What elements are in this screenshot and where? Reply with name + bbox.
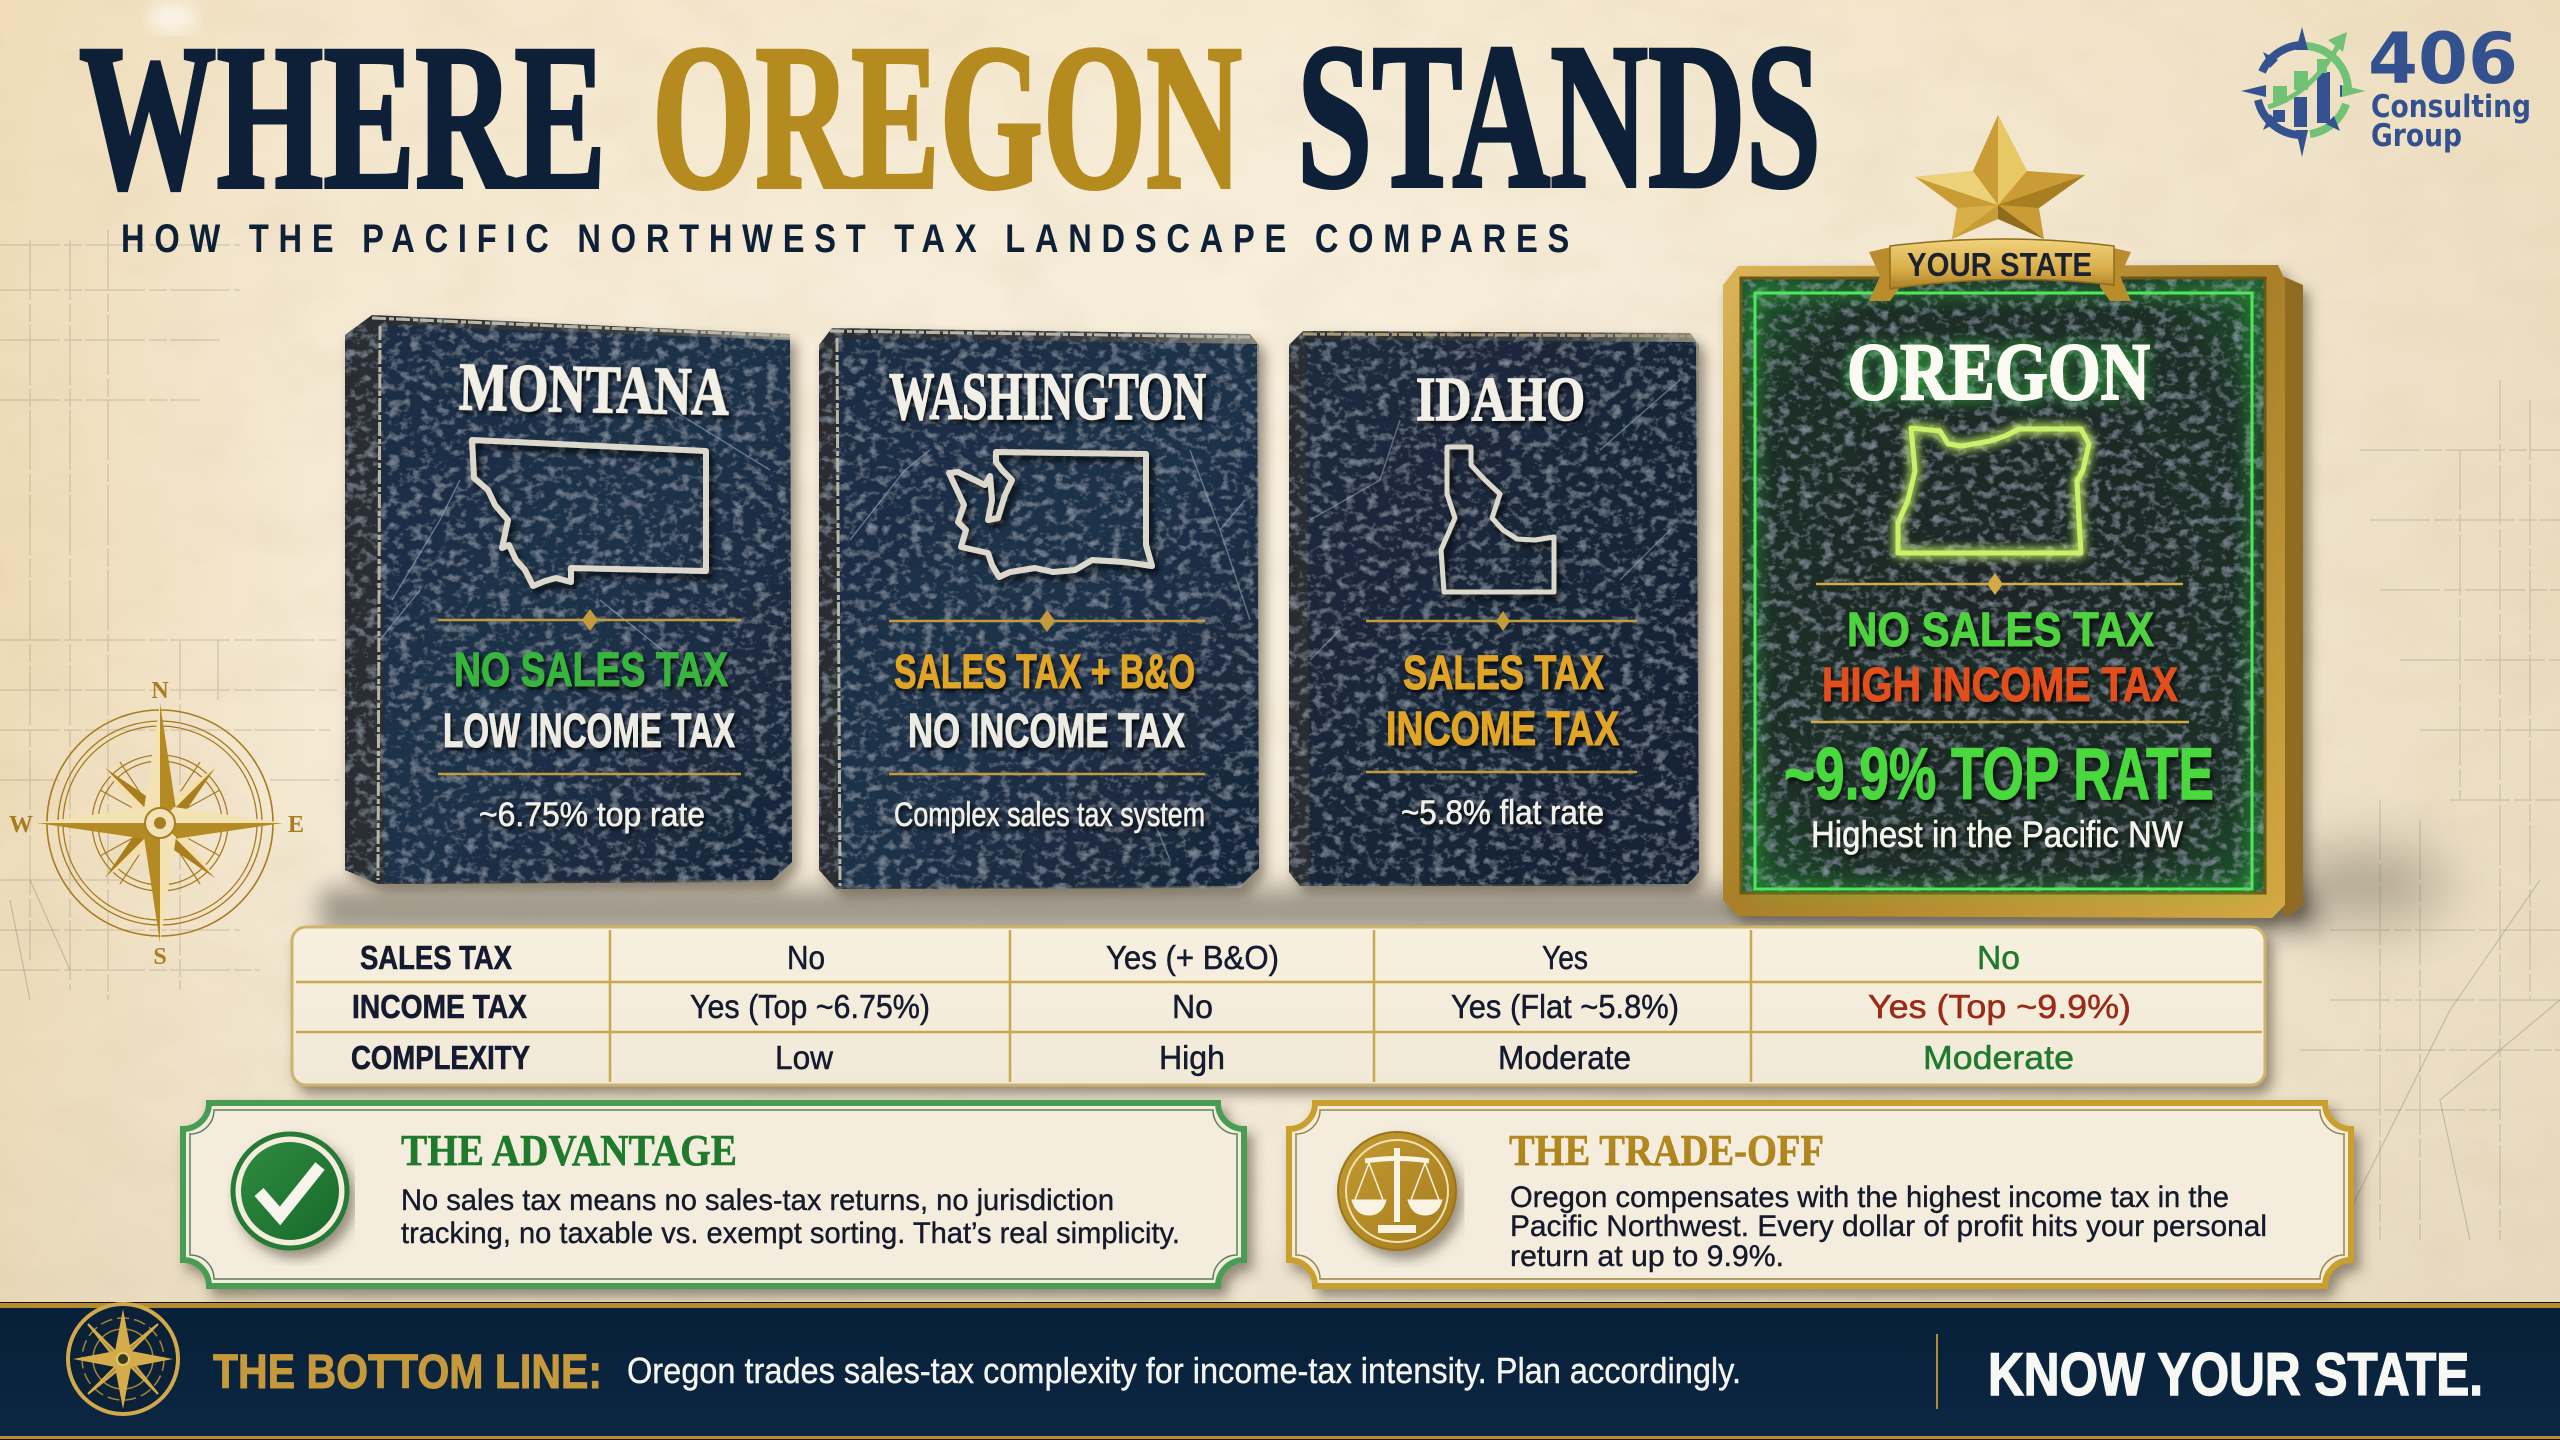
floor under the slabs — [320, 849, 2450, 932]
flat rate note: ~5.8% flat rate — [1401, 794, 1604, 832]
table row: income tax: INCOME TAX — [352, 988, 527, 1025]
panel: Montana slab — [345, 315, 792, 884]
title: OREGON — [652, 2, 1242, 232]
state name: OREGON — [1847, 326, 2150, 417]
tax status — [443, 644, 735, 758]
table row: income tax: Yes (Top ~9.9%) — [1868, 988, 2131, 1025]
tax status: NO SALES TAX — [1847, 604, 2154, 657]
logo mark — [2241, 27, 2365, 157]
table row: sales tax: Yes (+ B&O) — [1106, 939, 1279, 976]
table row: sales tax: Yes — [1542, 939, 1588, 976]
table row: complexity — [351, 1039, 2074, 1076]
icon: green check — [233, 1134, 347, 1248]
tax status: NO INCOME TAX — [908, 705, 1185, 758]
heading: THE TRADE-OFF — [1509, 1126, 1824, 1175]
table row: income tax: Yes (Flat ~5.8%) — [1451, 988, 1679, 1025]
logo: 406 Consulting Group: 406 — [2368, 18, 2518, 100]
state outline: Oregon — [1898, 428, 2089, 553]
icon: gold scales — [1338, 1132, 1456, 1250]
table row: sales tax — [360, 939, 2020, 976]
logo: 406 Consulting Group: Group — [2371, 118, 2462, 154]
state name: IDAHO — [1416, 366, 1585, 434]
bottom line label: THE BOTTOM LINE: — [213, 1346, 602, 1399]
state name: MONTANA — [458, 348, 730, 430]
body text — [401, 1184, 1180, 1250]
state outline: Idaho — [1441, 447, 1554, 592]
complexity note: Complex sales tax system — [894, 796, 1205, 834]
table row: complexity: Low — [775, 1039, 833, 1076]
table row: complexity: Moderate — [1923, 1039, 2074, 1076]
body text: No sales tax means no sales-tax returns, no jurisdiction — [401, 1184, 1114, 1217]
title: WHERE — [79, 2, 606, 232]
top rate note: ~6.75% top rate — [479, 796, 705, 834]
body text: return at up to 9.9%. — [1510, 1240, 1784, 1273]
divider — [438, 609, 741, 631]
slab body — [1289, 331, 1699, 886]
state outline: Montana — [472, 440, 706, 586]
body text: Oregon compensates with the highest income tax in the — [1510, 1181, 2229, 1214]
gold frame — [1723, 265, 2303, 918]
tax status: INCOME TAX — [1386, 703, 1619, 756]
icon: compass rose: N — [151, 678, 169, 704]
logo: 406 Consulting Group: Consulting — [2371, 89, 2531, 125]
state name: WASHINGTON — [889, 358, 1206, 434]
tax status: SALES TAX — [1403, 647, 1604, 700]
heading: THE ADVANTAGE — [401, 1126, 737, 1175]
table row: income tax: Yes (Top ~6.75%) — [690, 988, 930, 1025]
icon: navy compass medallion — [68, 1304, 178, 1414]
panel: Idaho slab — [1289, 331, 1699, 886]
table row: sales tax: No — [1977, 939, 2020, 976]
divider — [1816, 573, 2183, 595]
icon: gold star — [1915, 115, 2085, 239]
tax status — [894, 646, 1195, 758]
table row: complexity: Moderate — [1498, 1039, 1631, 1076]
title — [79, 1, 1821, 232]
body text: tracking, no taxable vs. exempt sorting. That’s real simplicity. — [401, 1217, 1180, 1250]
icon: compass rose: W — [9, 812, 33, 838]
tax status: NO SALES TAX — [454, 644, 728, 697]
table row: complexity: COMPLEXITY — [351, 1039, 530, 1076]
highest note: Highest in the Pacific NW — [1811, 814, 2183, 855]
badge: your state ribbon: YOUR STATE — [1907, 246, 2092, 283]
logo: 406 Consulting Group — [2241, 18, 2531, 157]
table row: income tax — [352, 988, 2131, 1025]
table row: complexity: High — [1159, 1039, 1225, 1076]
body text — [1510, 1181, 2267, 1273]
bottom banner — [0, 1302, 2560, 1440]
comparison table — [292, 927, 2265, 1085]
icon: compass rose: E — [288, 812, 304, 838]
title: STANDS — [1297, 1, 1821, 231]
tax status: LOW INCOME TAX — [443, 705, 735, 758]
tax status: SALES TAX + B&O — [894, 646, 1195, 699]
table row: sales tax: SALES TAX — [360, 939, 512, 976]
state outline: Washington — [949, 452, 1152, 577]
tax status — [1822, 604, 2178, 712]
panel: Oregon highlighted slab — [1723, 115, 2303, 918]
panel: Washington slab — [819, 328, 1259, 889]
top rate callout: ~9.9% TOP RATE — [1784, 734, 2214, 815]
tax status: HIGH INCOME TAX — [1822, 659, 2178, 712]
icon: compass rose — [9, 678, 304, 970]
table row: sales tax: No — [787, 939, 825, 976]
panel: the trade-off — [1289, 1103, 2351, 1286]
bottom line message: Oregon trades sales-tax complexity for income-tax intensity. Plan accordingly. — [627, 1350, 1741, 1391]
subtitle: HOW THE PACIFIC NORTHWEST TAX LANDSCAPE COMPARES — [121, 217, 1579, 261]
slab body — [345, 315, 792, 884]
slab body — [819, 328, 1259, 889]
icon: compass rose: S — [153, 944, 167, 970]
green neon border — [1755, 293, 2252, 889]
badge: your state ribbon — [1869, 239, 2131, 301]
divider — [1366, 611, 1637, 631]
panel: the advantage — [183, 1103, 1244, 1286]
tax status — [1386, 647, 1619, 756]
body text: Pacific Northwest. Every dollar of profit hits your personal — [1510, 1210, 2267, 1243]
divider — [889, 610, 1205, 632]
table row: income tax: No — [1172, 988, 1213, 1025]
